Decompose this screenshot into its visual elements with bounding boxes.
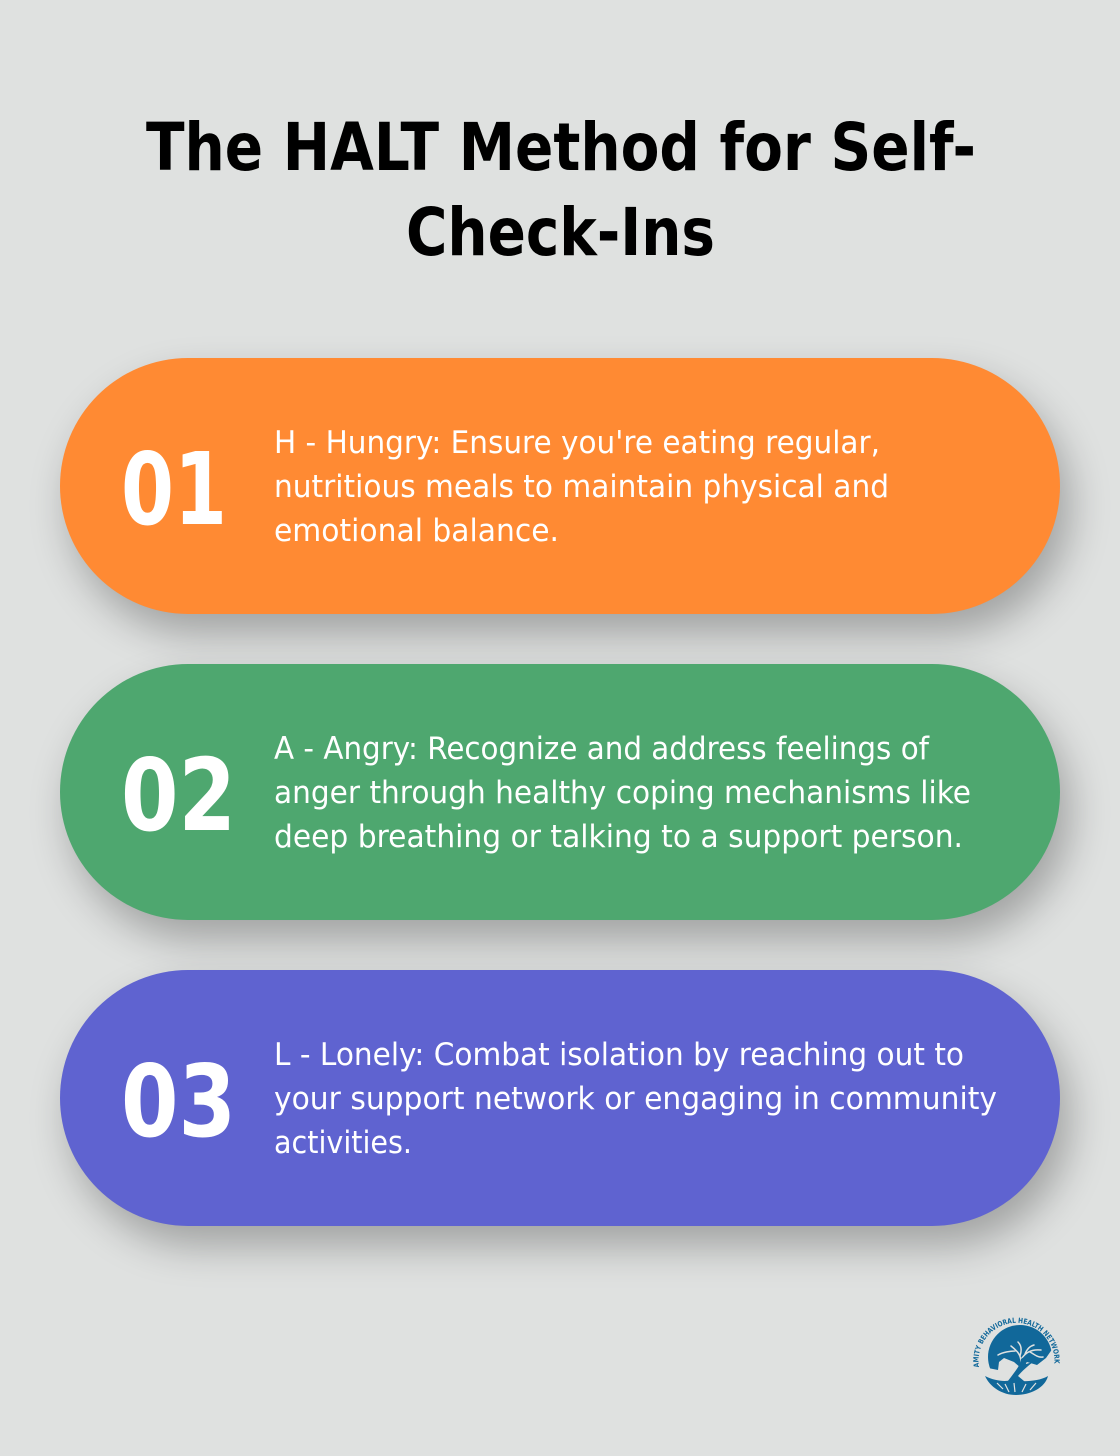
title [146,109,976,271]
text: Hungry description [274,425,889,549]
text: Lonely description: L - Lonely: Combat isolation by reaching out to [274,1037,964,1073]
title: The HALT Method for Self- [146,109,976,186]
text: Hungry description: H - Hungry: Ensure you're eating regular, [274,425,880,461]
text: Angry description: anger through healthy coping mechanisms like [274,775,971,811]
text: Lonely description [274,1037,997,1161]
icon: Amity Behavioral Health Network logo: AMITY BEHAVIORAL HEALTH NETWORK [973,1318,1060,1368]
text: Hungry description: emotional balance. [274,513,559,549]
icon: Amity Behavioral Health Network logo [973,1318,1060,1395]
text: Hungry description: nutritious meals to maintain physical and [274,469,889,505]
text: Angry description [274,731,971,855]
text: Lonely description: activities. [274,1125,412,1161]
step number 03: 03 [121,1043,236,1160]
text: Angry description: A - Angry: Recognize and address feelings of [274,731,930,767]
text: Angry description: deep breathing or talking to a support person. [274,819,963,855]
panel: L - Lonely [60,970,1060,1226]
panel: H - Hungry [60,358,1060,614]
text: Lonely description: your support network or engaging in community [274,1081,997,1117]
step number 01: 01 [121,431,227,548]
step number 02: 02 [121,737,236,854]
panel: A - Angry [60,664,1060,920]
title: Check-Ins [406,194,715,271]
